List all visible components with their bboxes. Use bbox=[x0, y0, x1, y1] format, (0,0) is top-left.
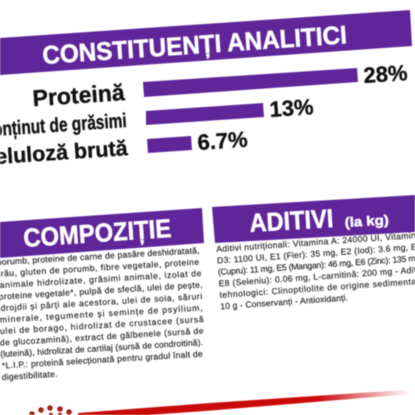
additives text: D3: 1100 UI, E1 (Fier): 35 mg, E2 (Iod): 3.6 mg, E bbox=[217, 242, 415, 266]
panel: additives bbox=[212, 195, 415, 311]
label: protein: Proteină bbox=[32, 79, 126, 111]
composition text bbox=[0, 245, 208, 382]
additives header band bbox=[212, 195, 415, 243]
composition text: animale hidrolizate, grăsimi animale, izolat de bbox=[0, 268, 202, 290]
composition text: de glucozamină), extract de gălbenele (sursă de bbox=[0, 326, 204, 348]
icon: crown logo dots bbox=[29, 405, 72, 415]
heading unit: (la kg) bbox=[344, 212, 389, 230]
heading: constituents: CONSTITUENȚI ANALITICI bbox=[42, 21, 348, 70]
value: 28%: 28% bbox=[363, 60, 408, 88]
additives text bbox=[216, 230, 415, 311]
red footer stripe bbox=[78, 390, 411, 415]
additives text: E8 (Seleniu): 0.06 mg, L-carnitină: 200 mg - Adit bbox=[218, 265, 415, 288]
panel: constituents header band bbox=[0, 10, 412, 75]
composition text: (luteină), hidrolizat de cartilaj (sursă de condroitină). bbox=[0, 337, 203, 359]
composition text: *L.I.P.: proteină selecționată pentru gradul înalt de bbox=[2, 349, 203, 371]
bar: protein bbox=[143, 68, 358, 97]
composition text: ulei de borago, hidrolizat de crustacee (sursă bbox=[0, 314, 204, 336]
bar chart: analytical constituents bbox=[0, 60, 408, 170]
composition text: minerale, tegumente și semințe de psyllium, bbox=[0, 303, 203, 325]
additives text: (Cupru): 11 mg, E5 (Mangan): 46 mg, E6 (Zinc): 135 m bbox=[218, 253, 415, 277]
composition text: digestibilitate. bbox=[1, 369, 58, 382]
value: 6.7%: 6.7% bbox=[197, 127, 248, 155]
value: 13%: 13% bbox=[269, 94, 314, 122]
composition text: porumb, proteine de carne de pasăre deshidratată, bbox=[0, 245, 200, 267]
composition header band bbox=[0, 208, 204, 258]
composition text: drojdii și părți ale acestora, ulei de soia, săruri bbox=[0, 291, 203, 313]
bar: fibre bbox=[147, 136, 192, 153]
composition text: proteine vegetale*, pulpă de sfeclă, ulei de pește, bbox=[0, 280, 203, 302]
panel: composition bbox=[0, 208, 208, 382]
additives text: tehnologici: Clinoptilolite de origine sedimenta bbox=[219, 276, 415, 300]
composition text: grâu, gluten de porumb, fibre vegetale, proteine bbox=[0, 257, 200, 279]
additives text: 10 g - Conservanți - Antioxidanți. bbox=[220, 292, 348, 311]
bar: fat bbox=[146, 103, 264, 125]
heading: composition: COMPOZIȚIE bbox=[22, 213, 172, 253]
heading: additives: ADITIVI bbox=[249, 203, 334, 238]
